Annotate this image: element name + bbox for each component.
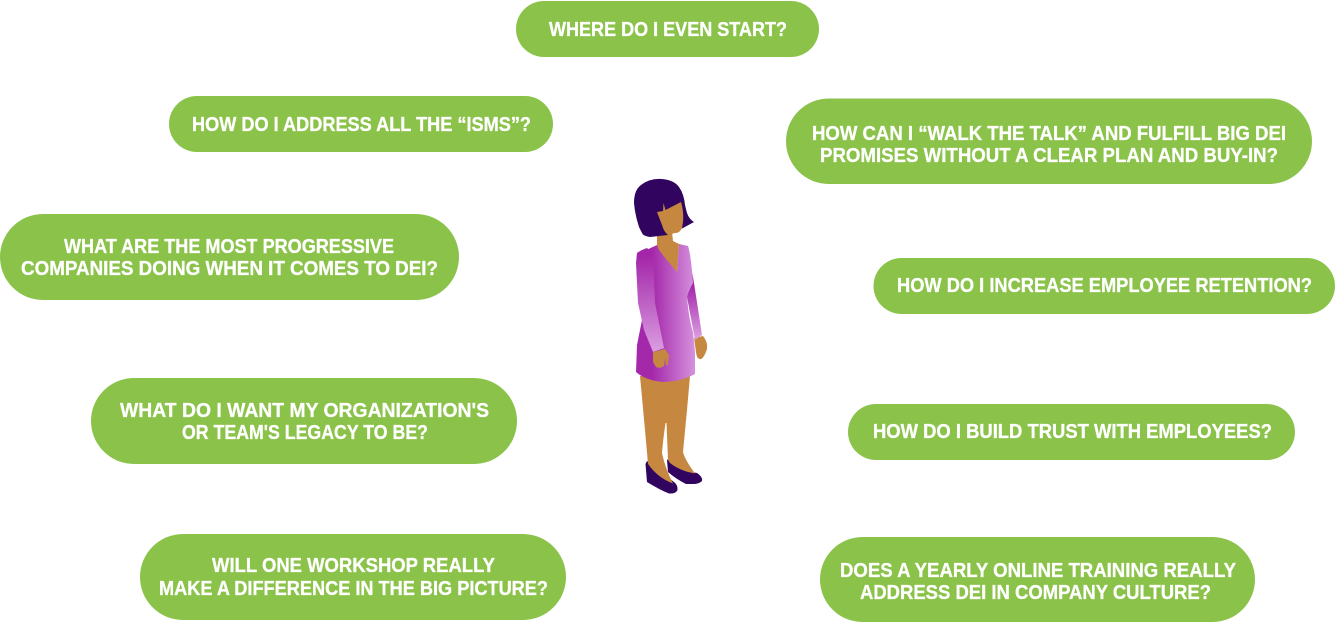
pill: build trust: HOW DO I BUILD TRUST WITH EMPLOYEES? bbox=[873, 421, 1272, 443]
left arm bbox=[636, 248, 664, 352]
pill: most progressive companies bbox=[0, 214, 459, 300]
hair bbox=[634, 179, 694, 237]
pill: organization legacy: WHAT DO I WANT MY ORGANIZATION'S bbox=[120, 400, 489, 422]
pill: organization legacy: OR TEAM'S LEGACY TO BE? bbox=[182, 422, 428, 444]
pill: one workshop: WILL ONE WORKSHOP REALLY bbox=[212, 555, 496, 577]
right arm bbox=[687, 262, 702, 340]
face bbox=[657, 202, 683, 235]
pill: yearly online training: ADDRESS DEI IN COMPANY CULTURE? bbox=[860, 582, 1211, 604]
legs bbox=[640, 376, 695, 484]
pill: how do I address all the isms: HOW DO I ADDRESS ALL THE “ISMS”? bbox=[192, 114, 531, 136]
neck bbox=[657, 232, 679, 272]
dress torso and skirt bbox=[636, 244, 695, 382]
pill: most progressive companies: COMPANIES DOING WHEN IT COMES TO DEI? bbox=[21, 258, 438, 280]
pill: where do I even start bbox=[516, 1, 819, 57]
pill: one workshop bbox=[140, 534, 566, 620]
pill: employee retention bbox=[874, 258, 1335, 314]
pill: walk the talk: PROMISES WITHOUT A CLEAR PLAN AND BUY-IN? bbox=[820, 145, 1278, 167]
pill: yearly online training bbox=[820, 537, 1255, 622]
shoe: left bbox=[646, 461, 678, 494]
figure: standing woman bbox=[634, 179, 707, 494]
pill: where do I even start: WHERE DO I EVEN START? bbox=[549, 19, 787, 41]
pill: walk the talk bbox=[786, 98, 1312, 184]
pill: walk the talk: HOW CAN I “WALK THE TALK” AND FULFILL BIG DEI bbox=[812, 123, 1286, 145]
pill: organization legacy bbox=[91, 378, 517, 464]
pill: one workshop: MAKE A DIFFERENCE IN THE BIG PICTURE? bbox=[159, 578, 548, 600]
pill: build trust bbox=[848, 404, 1295, 460]
pill: most progressive companies: WHAT ARE THE MOST PROGRESSIVE bbox=[64, 236, 394, 258]
right hand bbox=[694, 336, 707, 359]
shoe: right bbox=[667, 458, 702, 484]
left hand bbox=[653, 349, 669, 368]
pill: how do I address all the isms bbox=[169, 96, 553, 152]
pill: yearly online training: DOES A YEARLY ONLINE TRAINING REALLY bbox=[840, 560, 1237, 582]
